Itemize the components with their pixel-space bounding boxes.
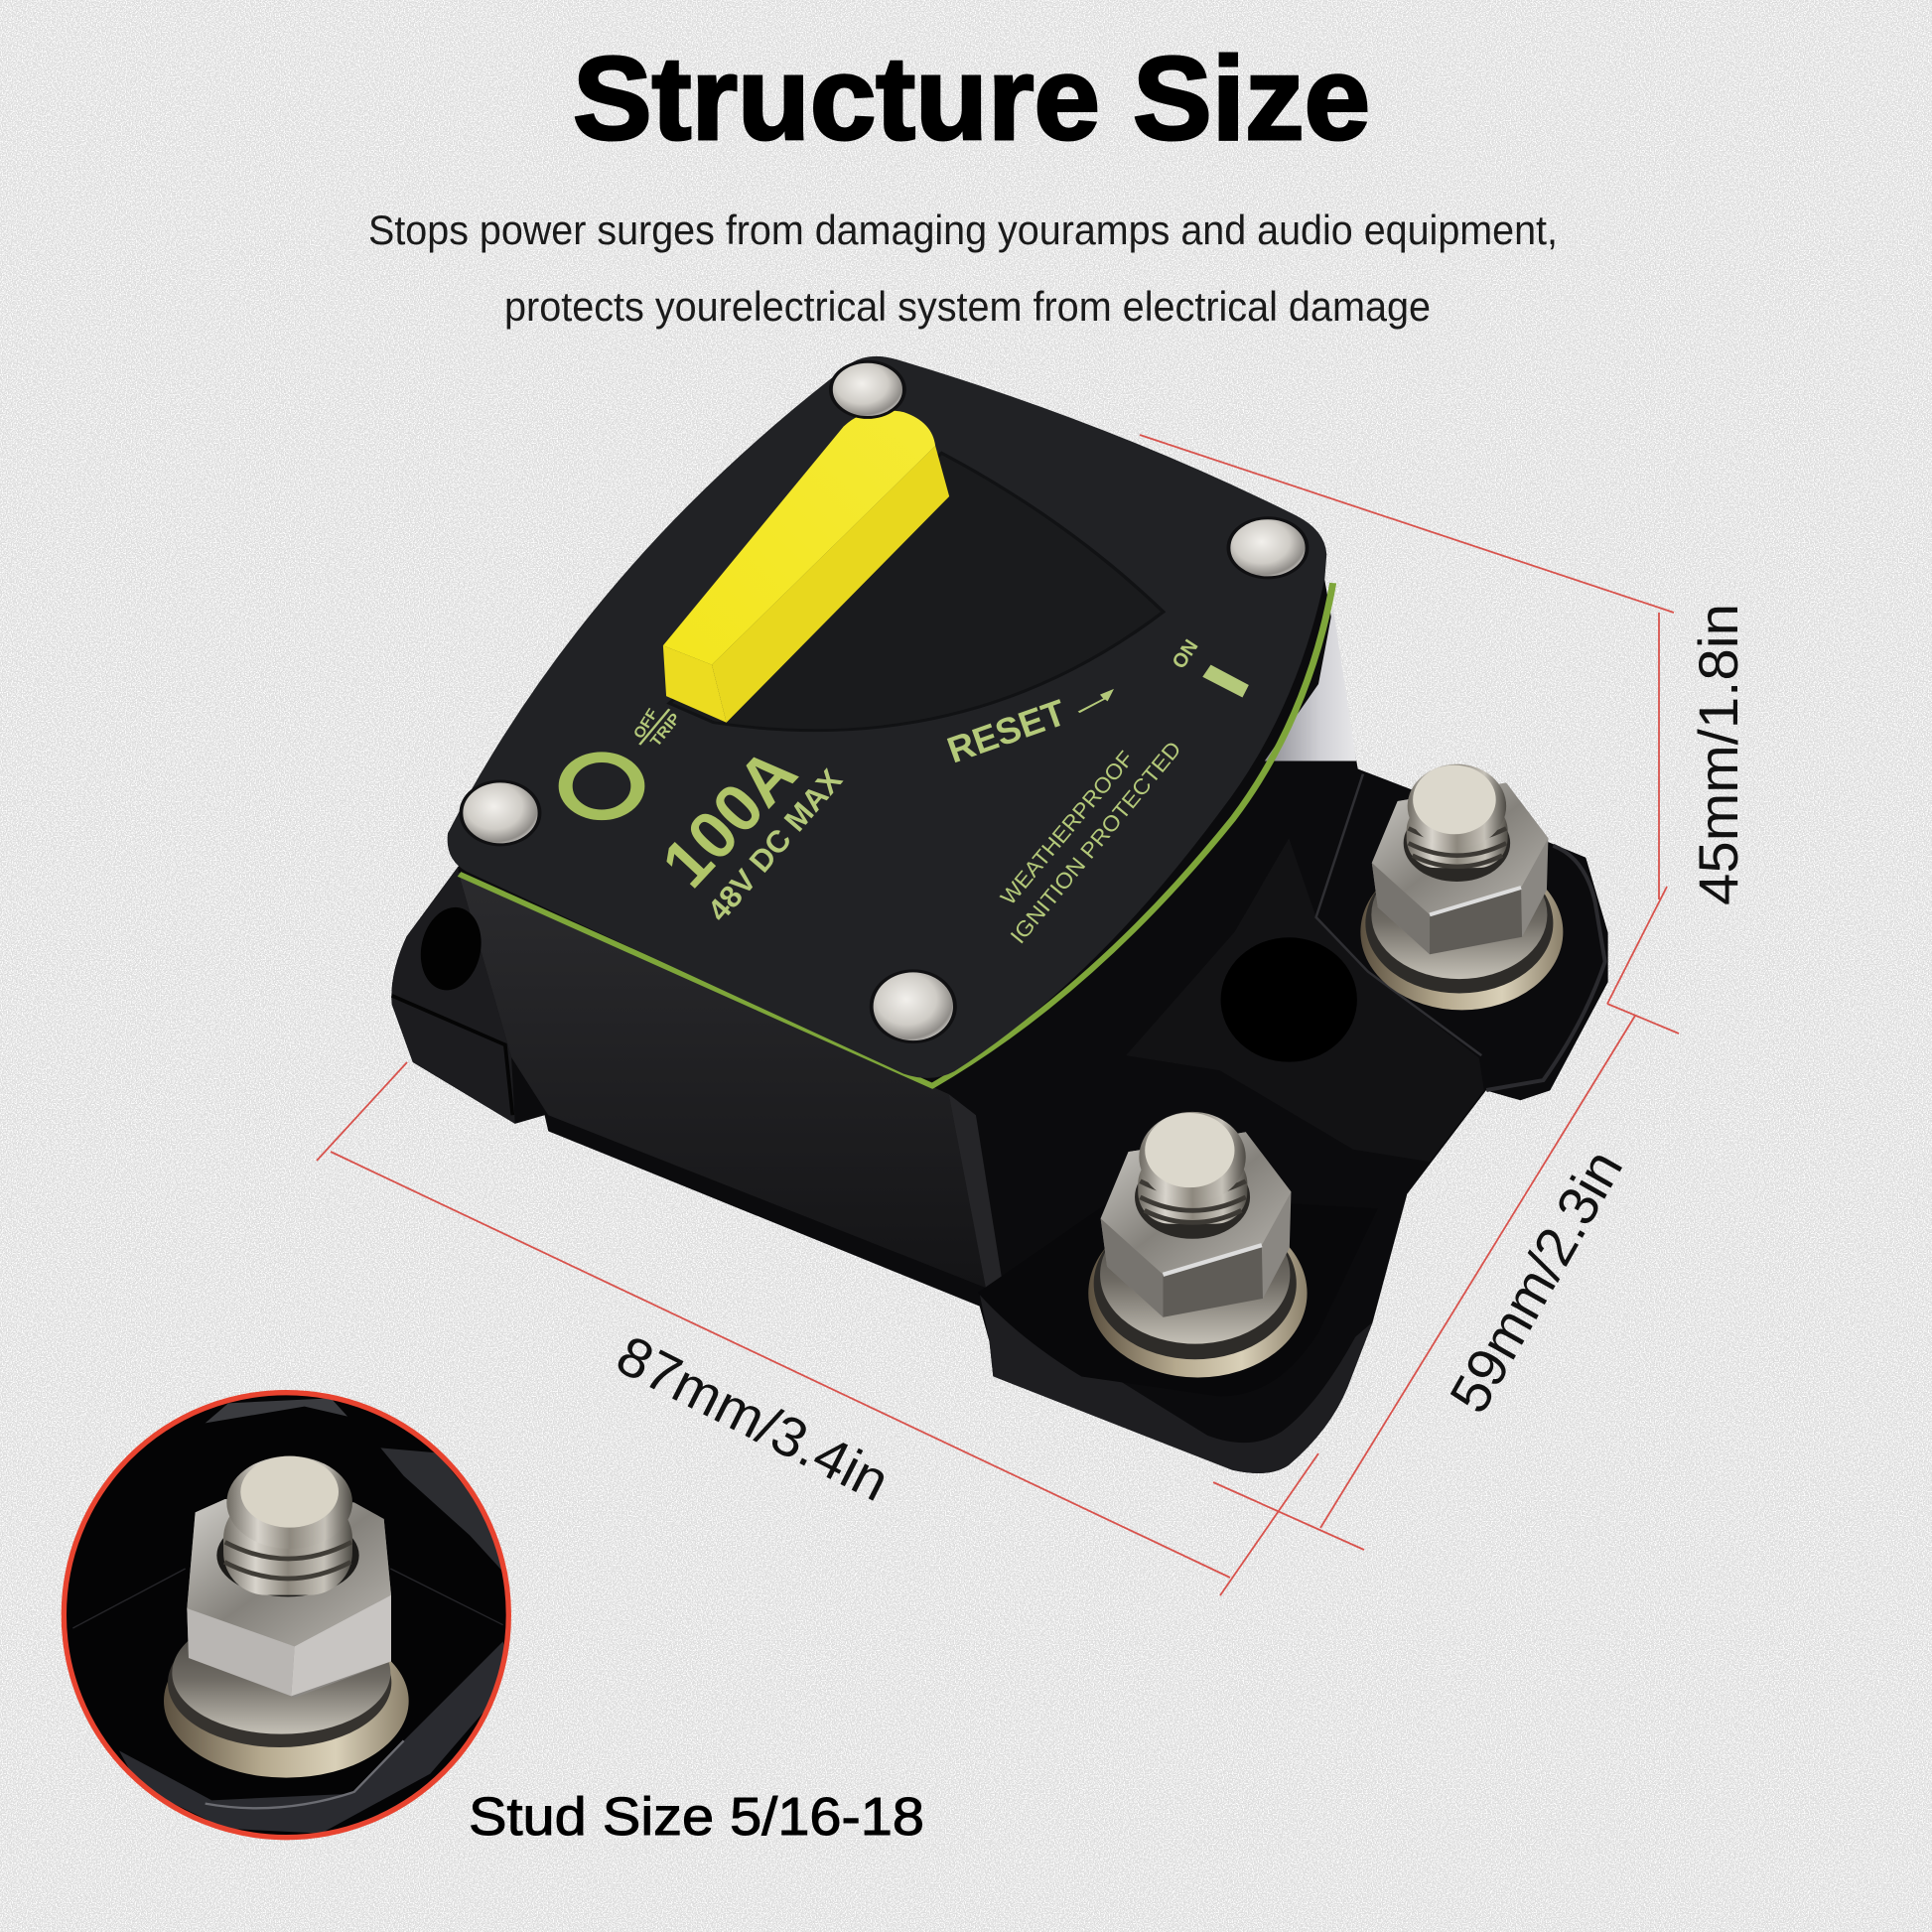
off trip separator [639,709,669,745]
stud thread [216,1538,359,1596]
panel printing [630,636,1203,948]
hex nut [187,1499,391,1698]
matte block with hole [1126,838,1484,1162]
label 45mm: 45mm/1.8in [1687,604,1749,905]
on label: ON [1169,636,1203,673]
off label: OFF [630,706,661,742]
terminal block details [978,764,1605,1396]
yellow lever [663,410,949,723]
subtitle line 2: protects yourelectrical system from electrical damage [504,283,1431,330]
terminal bolt upper [1360,764,1563,1010]
washer [164,1662,409,1778]
stud detail inset [60,1390,516,1847]
terminal bolt lower [1088,1112,1308,1377]
green seal [460,583,1333,1086]
off symbol [566,758,637,815]
breaker product illustration [391,356,1608,1473]
red ring [64,1393,508,1838]
reset: RESET [942,692,1071,771]
base silhouette [391,579,1608,1473]
plate and front face [448,356,1356,1086]
left side face [459,873,986,1288]
subtitle line 1: Stops power surges from damaging youramps and audio equipment, [368,207,1558,253]
base foot rim [980,1294,1373,1473]
trip label: TRIP [647,710,684,751]
ignition protected: IGNITION PROTECTED [1006,737,1186,948]
title: Structure Size [573,33,1370,165]
label 87mm: 87mm/3.4in [608,1323,899,1513]
screws [461,361,1308,1042]
top plate [448,356,1326,1078]
label 59mm: 59mm/2.3in [1438,1140,1634,1423]
mounting flange [391,866,515,1124]
white reflection on side [1265,607,1356,761]
subtitle text block [368,207,1558,330]
voltage: 48V DC MAX [701,762,849,928]
on bar [1202,665,1249,698]
inset photo [60,1390,516,1847]
mounting hole [1221,937,1357,1062]
weatherproof: WEATHERPROOF [996,747,1139,909]
stud size caption: Stud Size 5/16-18 [469,1787,924,1847]
body corner sheen [949,1094,1004,1294]
dimension lines [317,435,1679,1595]
stud tip [226,1456,352,1549]
reset arrow [1078,689,1114,713]
rating 100A: 100A [647,734,811,901]
recessed window [669,453,1164,731]
